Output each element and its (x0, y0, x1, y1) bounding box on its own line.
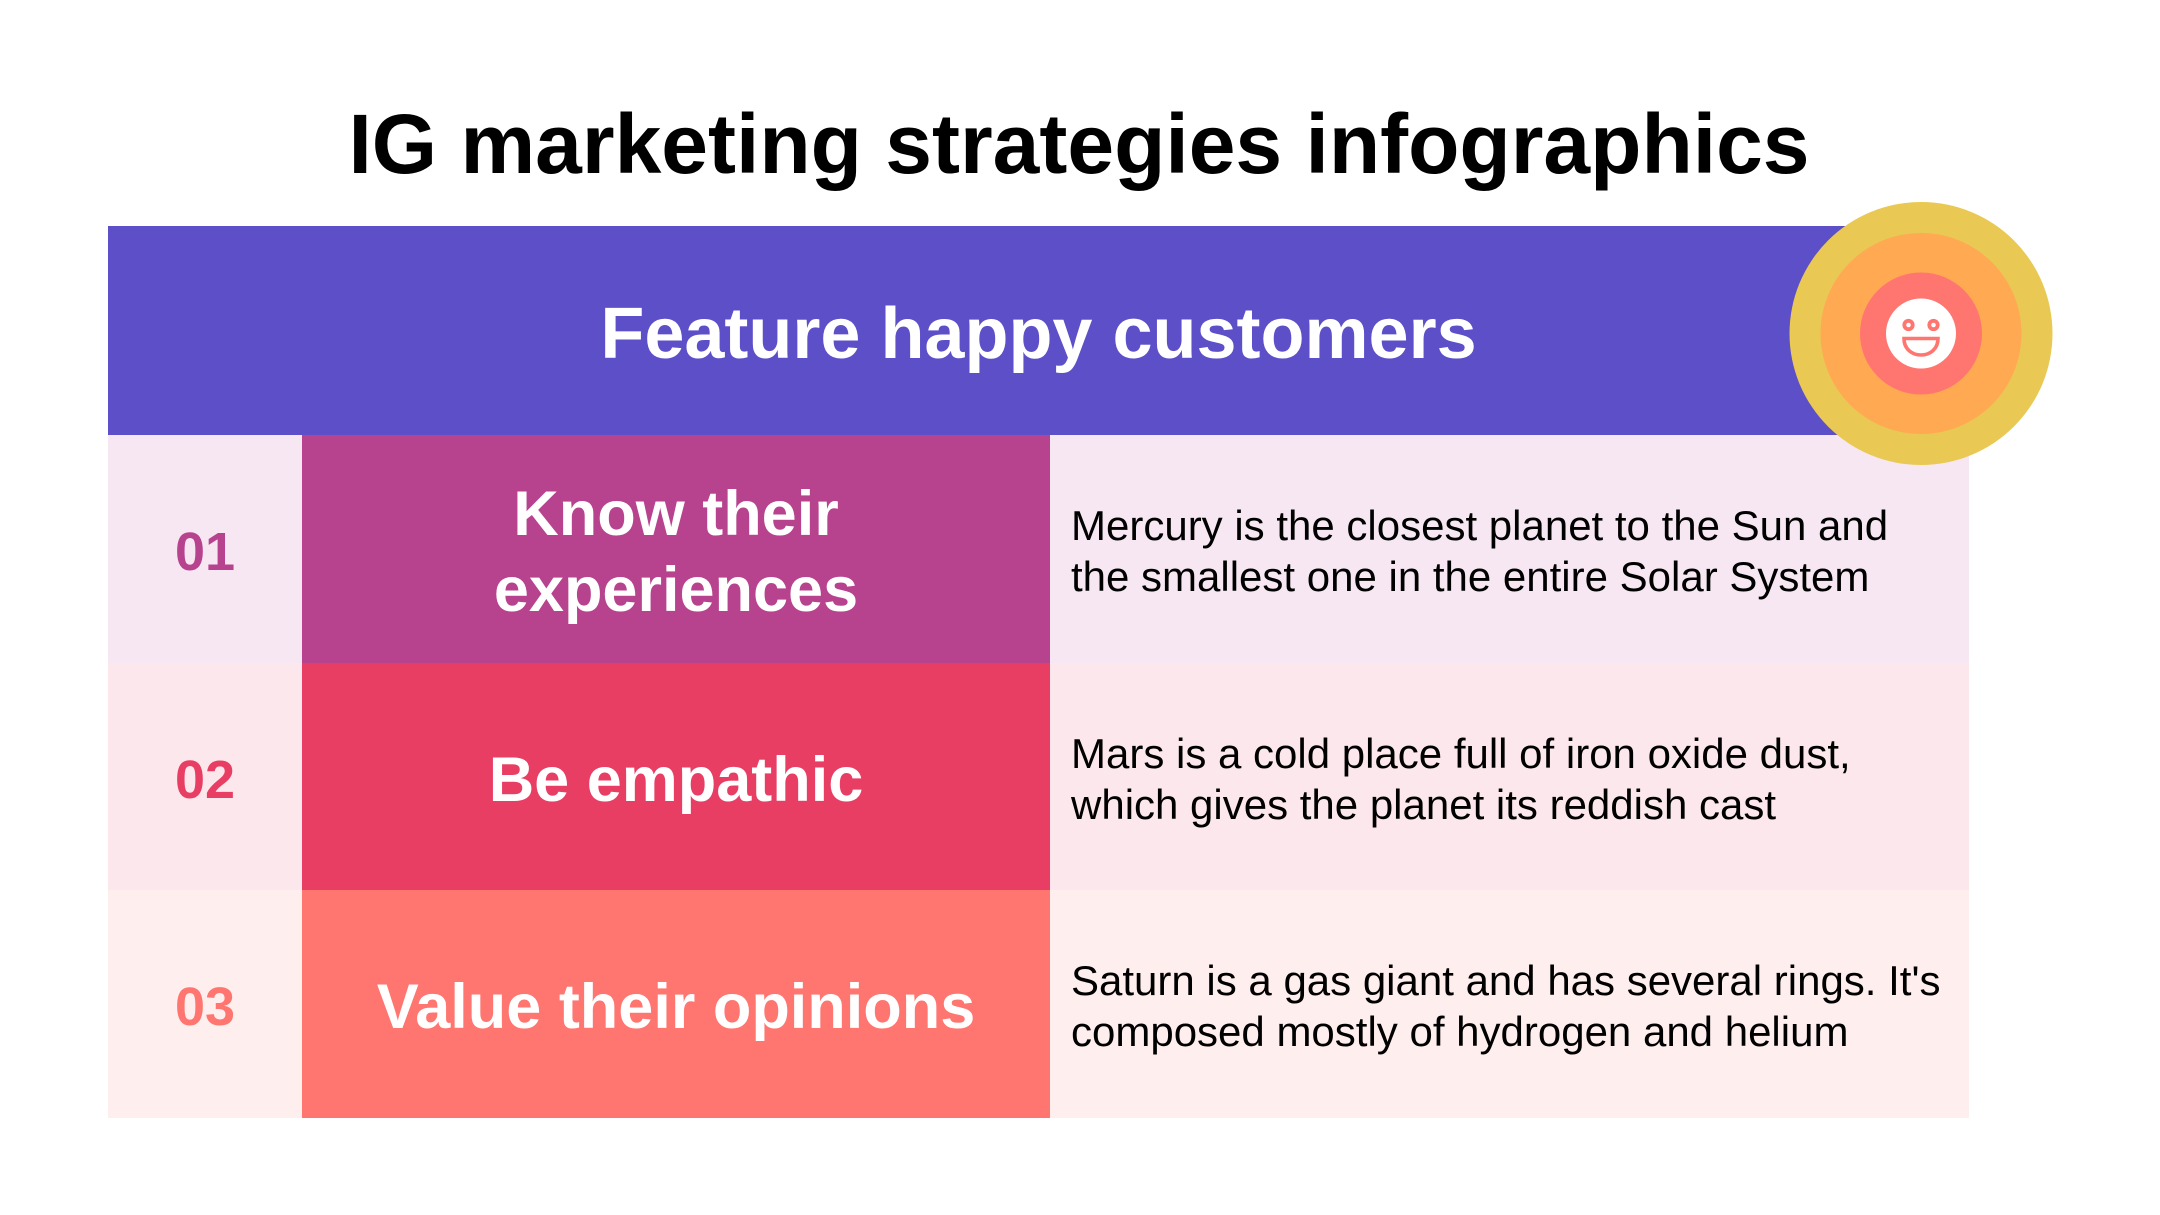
header text: Feature happy customers (600, 294, 1477, 374)
row 1 label: experiences (494, 555, 858, 625)
icon: concentric circles with smiley (1790, 202, 2052, 465)
row 2 number: 02 (175, 750, 235, 810)
row 1 label: Know their (513, 479, 839, 549)
row 3 label (302, 890, 1050, 1118)
row 3 description: Saturn is a gas giant and has several rings. It's (1071, 956, 1940, 1004)
row 1 (108, 435, 1969, 663)
row 2 (108, 663, 1969, 891)
row 3 description: composed mostly of hydrogen and helium (1071, 1008, 1848, 1054)
row 1 description: the smallest one in the entire Solar System (1071, 552, 1869, 600)
row 3 label: Value their opinions (377, 972, 975, 1042)
row 1 label (302, 435, 1050, 663)
row 2 description (1071, 730, 1851, 828)
row 2 description: which gives the planet its reddish cast (1071, 780, 1776, 828)
row 3 (108, 890, 1969, 1118)
title: IG marketing strategies infographics (348, 97, 1810, 191)
row 1 description: Mercury is the closest planet to the Sun and (1071, 502, 1888, 548)
row 2 label: Be empathic (489, 745, 863, 815)
row 3 number: 03 (175, 977, 235, 1037)
row 3 description (1071, 956, 1940, 1054)
row 1 description (1071, 502, 1888, 600)
row 1 number: 01 (175, 522, 235, 582)
header banner (108, 226, 1969, 435)
row 2 label (302, 663, 1050, 891)
row 2 description: Mars is a cold place full of iron oxide dust, (1071, 730, 1851, 776)
